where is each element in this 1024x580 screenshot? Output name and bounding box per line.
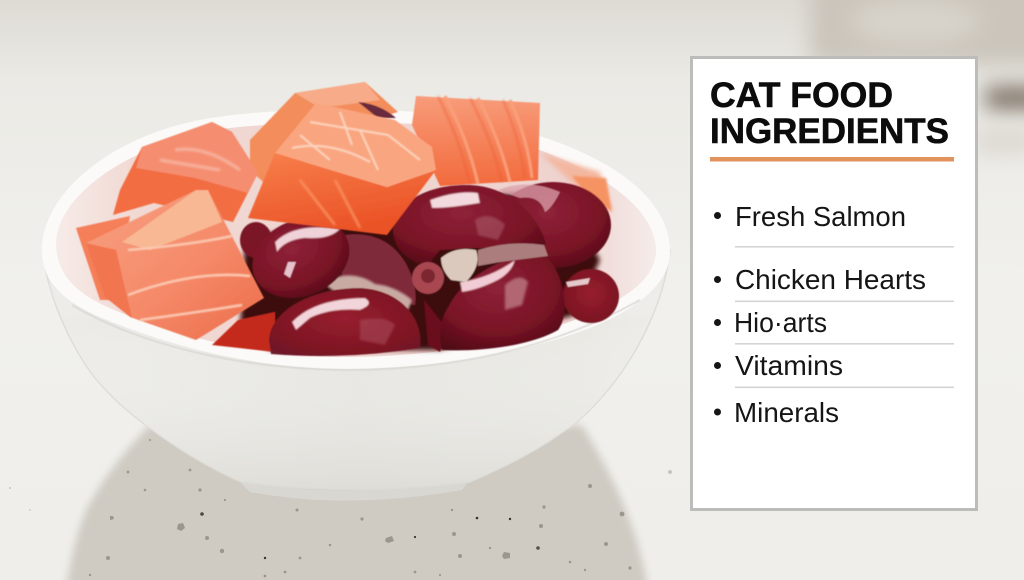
item: chicken hearts: Chicken Hearts — [735, 264, 926, 295]
heart center back — [322, 234, 416, 310]
heading — [710, 76, 949, 151]
orange rule — [710, 157, 954, 162]
salmon back top — [250, 82, 398, 190]
salmon far left — [76, 216, 130, 300]
item: hio-arts: Hio·arts — [734, 307, 827, 338]
heart upper center — [240, 204, 362, 312]
heart lower right — [563, 269, 619, 323]
bowl outer body — [43, 250, 670, 490]
salmon front left cube — [86, 190, 264, 340]
white bowl — [42, 110, 670, 501]
heading: INGREDIENTS — [710, 112, 949, 151]
food: salmon cubes in front — [86, 103, 436, 340]
under piece — [212, 312, 275, 352]
heart small left — [240, 222, 272, 258]
heart upper right — [393, 185, 546, 266]
dark cavity — [240, 190, 600, 350]
item: fresh salmon: Fresh Salmon — [735, 201, 906, 232]
salmon slices top — [412, 96, 540, 186]
food: salmon cubes at the back — [76, 82, 612, 300]
heart lower right large — [424, 254, 565, 352]
item: minerals: Minerals — [734, 397, 839, 428]
heart bottom center — [269, 288, 420, 356]
bowl inner wall — [56, 123, 656, 357]
bowl foot — [236, 474, 474, 501]
bowl rim — [42, 110, 670, 369]
rim shadow line — [72, 300, 640, 370]
salmon back left — [113, 122, 258, 222]
salmon big top cube — [248, 103, 436, 235]
heart back right — [495, 182, 611, 268]
ingredient list — [714, 201, 926, 428]
food: chicken hearts — [212, 182, 619, 356]
heading: CAT FOOD — [710, 76, 893, 115]
bowl shadow on counter — [66, 425, 648, 580]
counter speckles — [9, 439, 672, 577]
salmon back right — [540, 153, 612, 212]
valve tissue — [412, 243, 548, 294]
panel: cat food ingredients — [692, 58, 976, 510]
item: vitamins: Vitamins — [735, 350, 843, 381]
